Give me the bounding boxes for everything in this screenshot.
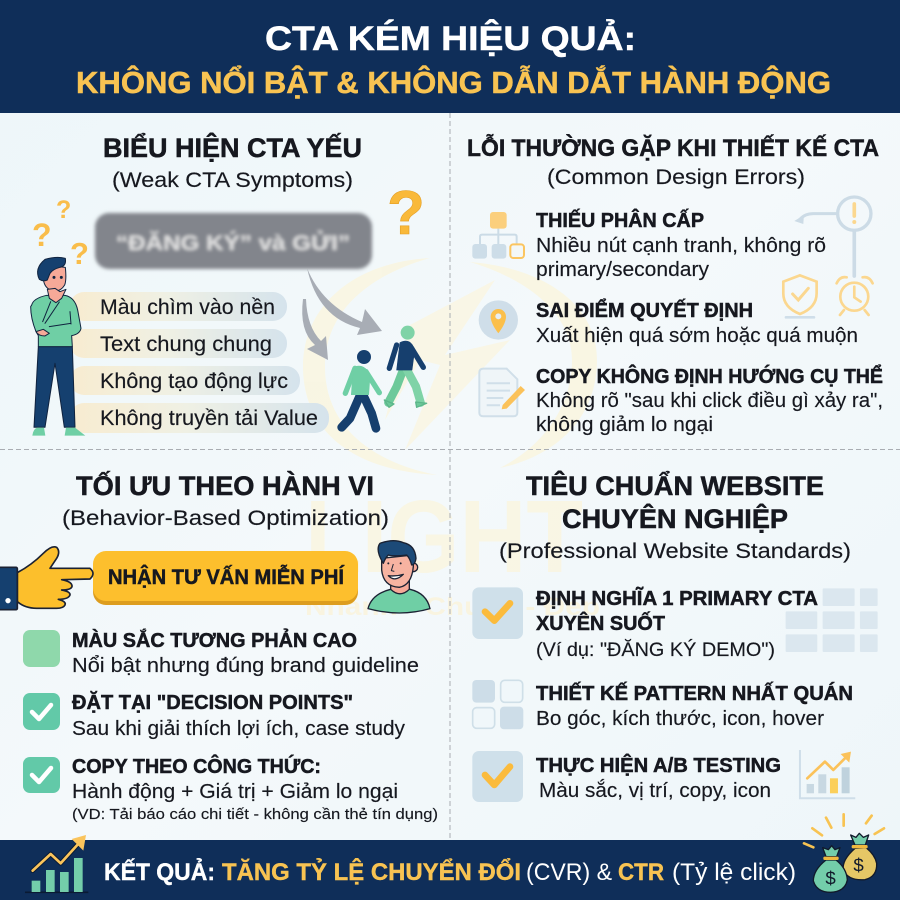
result text: (Tỷ lệ click) <box>672 859 796 886</box>
icon: growth chart <box>25 835 88 892</box>
title line 1: CTA KÉM HIỆU QUẢ: <box>265 20 636 58</box>
heading: LỖI THƯỜNG GẶP KHI THIẾT KẾ CTA <box>467 133 879 162</box>
decorative: layout grid <box>786 588 878 652</box>
illustration: smiling person <box>368 541 430 613</box>
panel: professional website standards <box>472 471 878 802</box>
arrows: grey curved arrows <box>302 268 382 360</box>
item: define primary CTA: ĐỊNH NGHĨA 1 PRIMARY CTA <box>536 587 818 610</box>
result text: TĂNG TỶ LỆ CHUYỂN ĐỔI <box>222 857 521 886</box>
item: unspecific copy: Không rõ "sau khi click điều gì xảy ra", <box>536 390 883 412</box>
heading: TIÊU CHUẨN WEBSITE <box>526 471 824 501</box>
result text: CTR <box>618 859 664 886</box>
symptom list: Không truyền tải Value <box>100 407 318 430</box>
heading: TỐI ƯU THEO HÀNH VI <box>76 471 374 501</box>
icon: large question mark: ? <box>387 179 425 248</box>
item: unspecific copy: không giảm lo ngại <box>536 414 713 436</box>
item: high contrast colours <box>23 628 419 677</box>
symptom list: Màu chìm vào nền <box>100 296 275 319</box>
blurred CTA button <box>95 213 372 269</box>
item: wrong decision point: Xuất hiện quá sớm hoặc quá muộn <box>536 325 858 347</box>
illustration: thinking man <box>31 257 85 436</box>
item: define primary CTA: XUYÊN SUỐT <box>536 611 665 635</box>
item: missing hierarchy: THIẾU PHÂN CẤP <box>536 208 704 232</box>
symptom list: Không tạo động lực <box>100 370 288 393</box>
blurred CTA button: “ĐĂNG KÝ” và GỬI” <box>116 231 350 255</box>
watermark: LIGHT logo: LIGHT <box>305 479 583 594</box>
icon: green square <box>23 630 60 667</box>
item: decision points <box>23 691 405 740</box>
icon: bar chart <box>800 750 855 798</box>
icon: small question marks: ? <box>70 236 89 271</box>
header banner <box>0 0 900 113</box>
icon: check box <box>23 693 60 730</box>
subheading: (Professional Website Standards) <box>499 539 851 563</box>
illustration: walking people <box>342 326 427 428</box>
CTA button: NHẬN TƯ VẤN MIỄN PHÍ <box>108 565 345 589</box>
subheading: (Weak CTA Symptoms) <box>112 168 353 192</box>
item: decision points: ĐẶT TẠI "DECISION POINTS" <box>72 691 353 714</box>
result text: KẾT QUẢ: <box>104 857 215 886</box>
item: consistent pattern <box>472 680 853 730</box>
result text <box>104 857 796 886</box>
item: copy formula <box>23 754 438 823</box>
item: A/B testing <box>472 750 855 802</box>
item: consistent pattern: THIẾT KẾ PATTERN NHẤT QUÁN <box>536 682 853 705</box>
panel: weak CTA symptoms <box>31 133 427 436</box>
subheading: (Common Design Errors) <box>547 165 805 189</box>
item: A/B testing: THỰC HIỆN A/B TESTING <box>536 753 781 777</box>
watermark: LIGHT logo: Nhanh - Chuẩn - Đẹp <box>305 593 600 621</box>
icon: check box <box>23 757 60 793</box>
item: missing hierarchy: Nhiều nút cạnh tranh, không rõ <box>536 235 826 257</box>
item: wrong decision point: SAI ĐIỂM QUYẾT ĐỊNH <box>536 299 753 322</box>
panel: behavior-based optimization <box>0 471 438 823</box>
icon: hierarchy <box>472 212 524 259</box>
icon: small question marks <box>32 196 89 271</box>
title line 2: KHÔNG NỔI BẬT & KHÔNG DẪN DẮT HÀNH ĐỘNG <box>76 64 831 100</box>
panel: common design errors <box>467 133 883 436</box>
item: copy formula: COPY THEO CÔNG THỨC: <box>72 754 321 778</box>
icon: money bags: $ <box>853 855 864 876</box>
item: decision points: Sau khi giải thích lợi ích, case study <box>72 718 405 740</box>
item: unspecific copy <box>479 364 883 436</box>
icon: money bags: $ <box>825 867 836 888</box>
icon: pattern squares <box>472 680 523 729</box>
icon: money bags <box>804 814 884 892</box>
symptom list <box>70 292 329 433</box>
icon: small question marks: ? <box>56 196 71 224</box>
item: high contrast colours: MÀU SẮC TƯƠNG PHẢN CAO <box>72 628 357 652</box>
item: missing hierarchy: primary/secondary <box>536 259 709 281</box>
item: copy formula: Hành động + Giá trị + Giảm lo ngại <box>72 781 398 803</box>
item: unspecific copy: COPY KHÔNG ĐỊNH HƯỚNG CỤ THỂ <box>536 364 883 388</box>
icon: small question marks: ? <box>32 217 52 253</box>
icon: document with pencil <box>479 369 525 416</box>
subheading: (Behavior-Based Optimization) <box>62 506 389 530</box>
icon: orange check <box>472 751 523 802</box>
item: copy formula: (VD: Tải báo cáo chi tiết - không cần thẻ tín dụng) <box>72 806 438 823</box>
footer banner <box>0 814 900 900</box>
result text: (CVR) & <box>526 859 612 886</box>
watermark: LIGHT logo <box>303 258 600 621</box>
item: define primary CTA: (Ví dụ: "ĐĂNG KÝ DEMO") <box>536 640 775 661</box>
decorative: alert, shield and clock <box>783 197 873 317</box>
symptom list: Text chung chung <box>100 333 272 356</box>
item: define primary CTA <box>472 587 818 661</box>
CTA button <box>93 551 358 605</box>
item: missing hierarchy <box>472 208 826 281</box>
panel: professional website standards: CHUYÊN NGHIỆP <box>562 504 788 534</box>
item: high contrast colours: Nổi bật nhưng đúng brand guideline <box>72 655 419 677</box>
heading: BIỂU HIỆN CTA YẾU <box>103 133 362 163</box>
item: consistent pattern: Bo góc, kích thước, icon, hover <box>536 708 824 730</box>
icon: orange check <box>472 587 523 639</box>
item: wrong decision point <box>479 299 858 347</box>
item: A/B testing: Màu sắc, vị trí, copy, icon <box>539 779 771 802</box>
icon: map pin <box>479 300 518 340</box>
icon: pointing hand <box>0 547 93 610</box>
